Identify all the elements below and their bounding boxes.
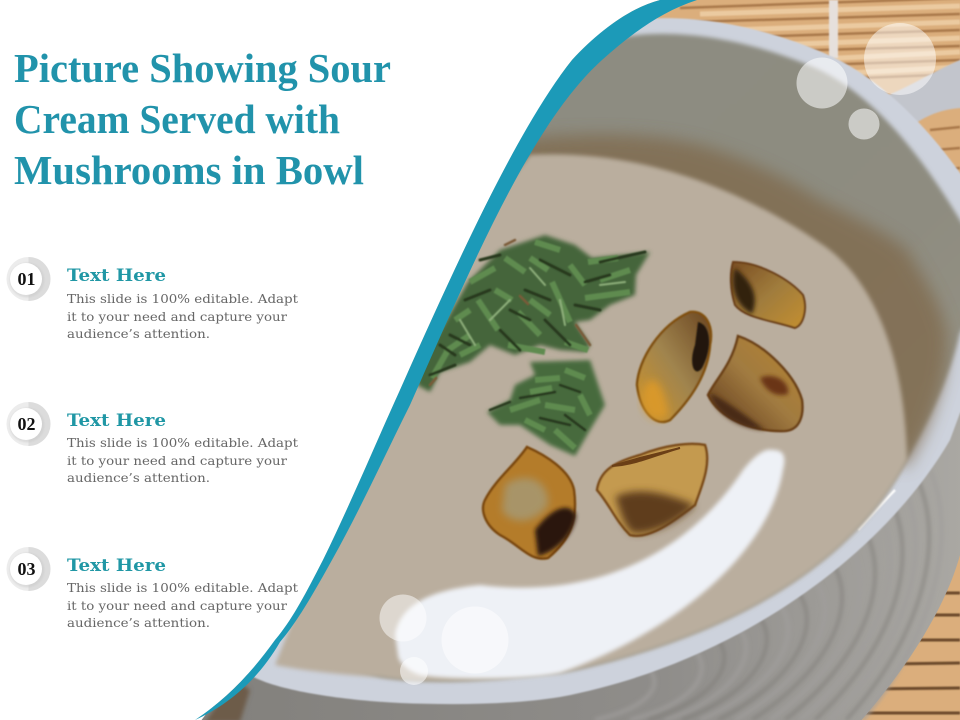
body text 01: it to your need and capture your [67, 309, 287, 324]
title [14, 45, 391, 193]
dark corner under bowl [205, 680, 250, 720]
bowl outer body [200, 400, 960, 720]
soup shadow [510, 135, 947, 470]
number badge 02 [6, 402, 50, 446]
bowl rim [245, 18, 960, 704]
item 01 [6, 257, 298, 341]
number badge 02: 02 [18, 414, 36, 434]
bamboo mat [560, 0, 960, 720]
herbs upper pile [417, 235, 650, 392]
number badge 03: 03 [18, 559, 36, 579]
body text 01: audience’s attention. [67, 326, 210, 341]
lower bamboo slats [850, 593, 960, 713]
number badge 01: 01 [18, 269, 36, 289]
body text 02: it to your need and capture your [67, 453, 287, 468]
bowl exterior ribs [595, 470, 942, 720]
number badge 03 [6, 547, 50, 591]
title: Picture Showing Sour [14, 45, 391, 91]
decorative bubbles top right [796, 23, 936, 140]
mushroom 4 [483, 447, 576, 559]
mushroom 1 [731, 262, 805, 328]
number badge 01 [6, 257, 50, 301]
body text 02: audience’s attention. [67, 470, 210, 485]
body text 03: it to your need and capture your [67, 598, 287, 613]
teal curved band [195, 0, 697, 720]
herbs lower pile [487, 360, 605, 456]
body text 03: This slide is 100% editable. Adapt [67, 580, 298, 595]
decorative bubbles bottom [380, 594, 508, 685]
body text 03: audience’s attention. [67, 615, 210, 630]
heading 02: Text Here [67, 411, 166, 431]
soup surface [275, 154, 907, 681]
mushroom 2 [637, 312, 711, 422]
item 02 [6, 402, 298, 485]
title: Mushrooms in Bowl [14, 147, 364, 193]
body text 03 [67, 580, 298, 630]
background photo: bowl of soup on bamboo mat [200, 0, 960, 720]
mushroom 3 [708, 336, 802, 431]
item 03 [6, 547, 298, 630]
body text 02 [67, 435, 298, 485]
rim highlight [858, 490, 895, 530]
body text 01 [67, 291, 298, 341]
heading 03: Text Here [67, 556, 166, 576]
white left panel with curved edge [0, 0, 660, 720]
body text 01: This slide is 100% editable. Adapt [67, 291, 298, 306]
mushroom pieces [483, 262, 805, 559]
heading 01: Text Here [67, 266, 166, 286]
bowl inner wall [290, 34, 960, 681]
cream swirl [395, 450, 784, 679]
body text 02: This slide is 100% editable. Adapt [67, 435, 298, 450]
title: Cream Served with [14, 96, 340, 142]
mushroom 5 [597, 444, 707, 536]
bowl handle [880, 58, 960, 128]
